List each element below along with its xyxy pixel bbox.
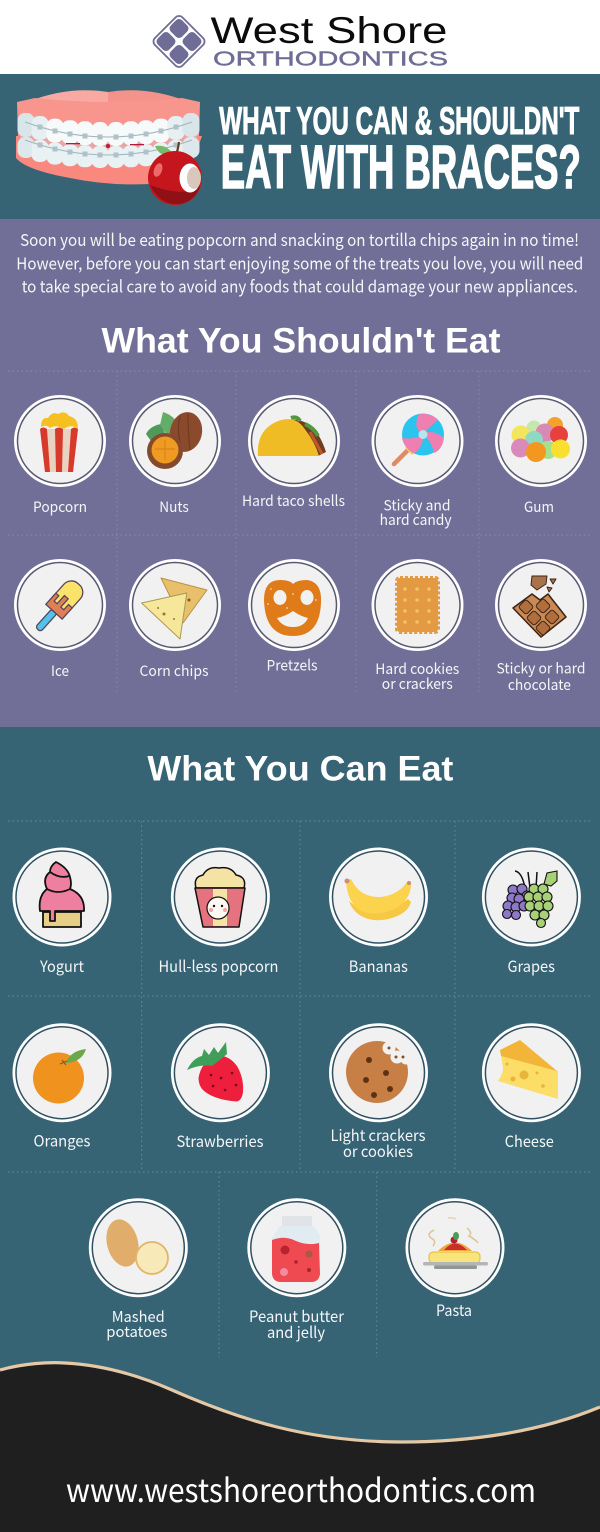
icon: lollipop <box>394 414 444 464</box>
label: Hard cookies <box>375 658 460 679</box>
icon: corn chips <box>142 578 207 639</box>
label: Grapes <box>507 955 555 977</box>
label: Yogurt <box>39 955 84 977</box>
section: what you can eat background <box>0 727 600 1532</box>
label: Nuts <box>159 496 189 517</box>
icon: bananas <box>344 878 411 920</box>
logo name: West Shore <box>210 10 448 51</box>
label: Corn chips <box>140 660 209 681</box>
section: what you shouldn't eat background <box>0 219 600 727</box>
icon: chocolate bar <box>513 576 566 637</box>
heading: what you shouldn't eat: What You Shouldn't Eat <box>102 322 501 361</box>
icon: frozen yogurt <box>40 862 84 927</box>
item: mashed potatoes: potatoes <box>106 1321 167 1342</box>
logo subtitle: ORTHODONTICS <box>213 48 448 70</box>
icon: popcorn bucket with face <box>195 868 245 927</box>
icon: pretzel <box>264 580 321 636</box>
item: gum <box>495 395 587 517</box>
label: Peanut butter <box>249 1305 345 1327</box>
footer website url: www.westshoreorthodontics.com <box>66 1466 536 1512</box>
item: grapes <box>482 848 581 977</box>
item: nuts <box>129 395 221 517</box>
item: hard taco shells <box>242 395 345 511</box>
item: ice <box>14 559 106 681</box>
icon: popcorn box <box>40 412 78 472</box>
intro text <box>16 227 583 298</box>
label: Cheese <box>505 1130 554 1152</box>
item: hard cookies or crackers <box>372 559 464 694</box>
footer wave <box>0 1363 600 1532</box>
icon: gum balls <box>511 417 570 462</box>
item: peanut butter and jelly: and jelly <box>267 1321 325 1343</box>
item: light crackers or cookies <box>329 1023 428 1162</box>
icon: jam jar <box>272 1216 320 1282</box>
icon: cracker <box>397 578 438 632</box>
label: Hard taco shells <box>242 490 345 511</box>
section: header band background <box>0 74 600 219</box>
logo <box>151 10 448 70</box>
item: mashed potatoes <box>89 1198 188 1342</box>
label: Hull-less popcorn <box>158 955 278 977</box>
item: bananas <box>329 848 428 977</box>
item: oranges <box>12 1023 112 1152</box>
icon: orange <box>33 1049 86 1104</box>
label: Pasta <box>436 1299 472 1321</box>
item: peanut butter and jelly <box>247 1198 346 1343</box>
item: hard cookies or crackers: or crackers <box>382 673 453 694</box>
item: sticky and hard candy: hard candy <box>380 509 452 530</box>
item: cheese <box>482 1023 581 1152</box>
icon: cookie with bite <box>346 1041 412 1103</box>
label: Mashed <box>112 1306 165 1327</box>
icon: walnuts and leaves <box>146 409 206 469</box>
item: light crackers or cookies: or cookies <box>343 1140 413 1162</box>
icon: taco <box>258 417 326 456</box>
icon: grapes <box>502 871 557 928</box>
heading: what you can eat: What You Can Eat <box>147 750 454 789</box>
label: Bananas <box>349 955 408 977</box>
title <box>219 100 581 201</box>
label: Gum <box>524 496 554 517</box>
icon: potato <box>102 1216 168 1274</box>
label: Sticky and <box>384 495 450 516</box>
label: Sticky or hard <box>496 658 586 678</box>
label: Popcorn <box>33 496 87 517</box>
item: sticky or hard chocolate: chocolate <box>508 674 571 695</box>
item: pasta <box>406 1198 504 1321</box>
item: strawberries <box>171 1023 270 1152</box>
label: Strawberries <box>176 1130 264 1152</box>
icon: ice pop <box>30 577 87 637</box>
item: sticky and hard candy <box>372 395 464 530</box>
label: Light crackers <box>330 1124 426 1146</box>
item: corn chips <box>129 559 221 681</box>
item: pretzels <box>248 559 340 676</box>
icon: logo diamond <box>151 14 207 69</box>
icon: apple <box>148 142 202 205</box>
item: sticky or hard chocolate <box>495 559 587 695</box>
item: hull-less popcorn <box>158 848 278 977</box>
icon: pasta plate <box>423 1218 488 1269</box>
item: popcorn <box>14 395 106 517</box>
label: Ice <box>51 660 69 681</box>
label: Oranges <box>34 1130 90 1152</box>
label: Pretzels <box>266 655 318 676</box>
illustration: teeth with braces and apple <box>16 90 202 205</box>
icon: strawberry <box>187 1042 243 1102</box>
item: yogurt <box>12 848 112 977</box>
icon: cheese wedge <box>498 1040 558 1099</box>
